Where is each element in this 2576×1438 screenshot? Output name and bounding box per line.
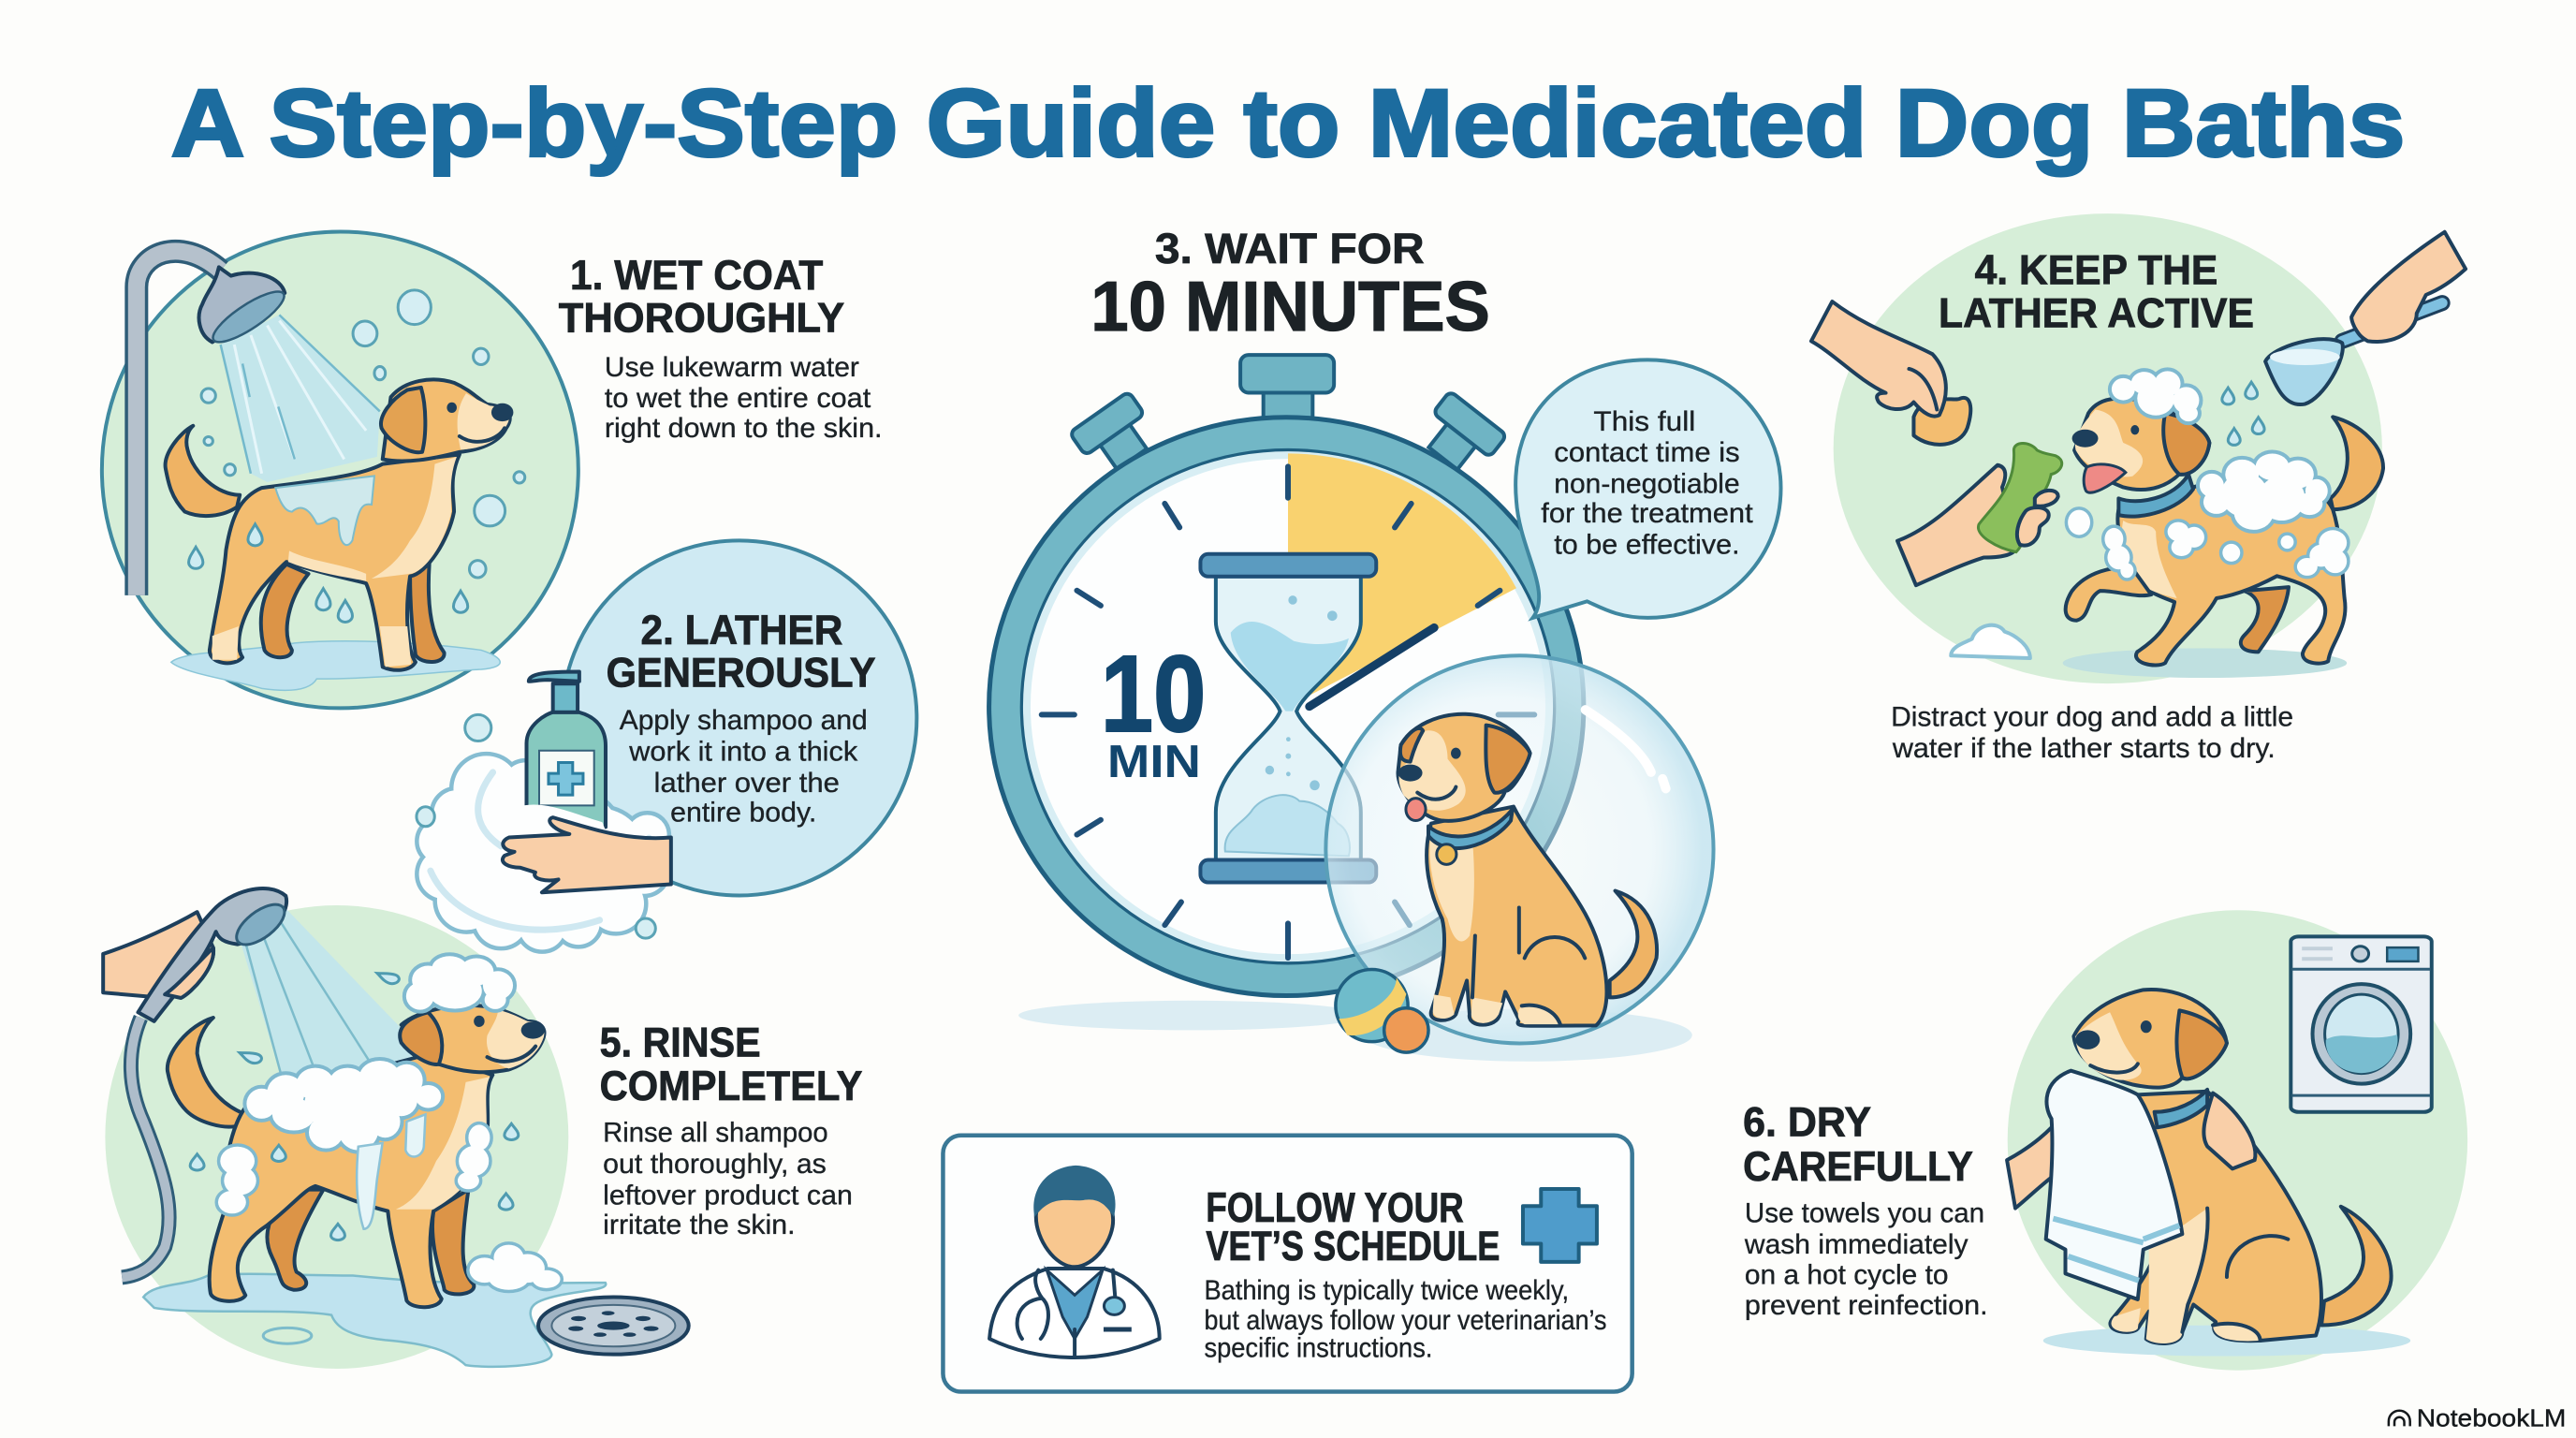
front legs and paws [2112, 1209, 2261, 1343]
falling drops [2222, 382, 2264, 445]
text: step 2 body: entire body. [670, 798, 816, 829]
NotebookLM logo: NotebookLM [2417, 1405, 2566, 1431]
face inner shading [1027, 455, 1549, 958]
text: step 6 body: on a hot cycle to [1745, 1260, 1949, 1291]
green blob backdrop [1834, 213, 2382, 683]
icon: medical cross [1523, 1189, 1597, 1262]
hair [1033, 1166, 1116, 1217]
hose [122, 1018, 169, 1277]
foam on dog [218, 956, 561, 1290]
text: vet schedule body: Bathing is typically twice weekly, [1204, 1275, 1569, 1306]
heading: step 4 [1939, 247, 2254, 336]
handheld shower [138, 888, 294, 1021]
puddle [143, 1274, 606, 1367]
stopwatch buttons [1069, 355, 1507, 480]
text: vet schedule body: specific instructions. [1204, 1333, 1432, 1364]
ground shadow [2063, 648, 2347, 678]
hourglass bars [1200, 554, 1376, 882]
illustration: washer and drying dog [2007, 936, 2432, 1357]
soap bubble [1325, 655, 1714, 1043]
heading: step 4: LATHER ACTIVE [1939, 289, 2254, 336]
hourglass foam [1225, 795, 1350, 856]
heading: step 2: 2. LATHER [641, 607, 842, 653]
callout text: for the treatment [1541, 498, 1753, 529]
heading: step 1 [559, 252, 844, 342]
text: step 6 body: Use towels you can [1745, 1198, 1984, 1229]
text: step 6 body [1744, 1198, 1988, 1321]
dog chest [396, 1077, 490, 1210]
heading: step 6: 6. DRY [1743, 1098, 1871, 1145]
illustration: rinsing dog [103, 888, 689, 1367]
small foam bubbles [417, 714, 655, 938]
drops [190, 969, 519, 1240]
small foam cloud [1951, 625, 2030, 658]
dog far back leg [2241, 587, 2289, 652]
elapsed time wedge [1288, 453, 1516, 707]
panel: vet schedule callout [943, 1136, 1632, 1392]
dog head [2073, 990, 2227, 1088]
heading: step 5: 5. RINSE [600, 1019, 761, 1065]
foam drips [357, 1114, 426, 1229]
text: vet schedule body: but always follow your veterinarian’s [1204, 1305, 1606, 1336]
text: step 1 body: Use lukewarm water [605, 352, 859, 383]
10 MIN label: 10 [1101, 633, 1206, 755]
head [1398, 714, 1530, 821]
tick marks [1042, 466, 1500, 958]
arm [2007, 1112, 2110, 1209]
callout text [1541, 406, 1753, 560]
tail [1610, 890, 1657, 997]
heading: step 6 [1743, 1098, 1973, 1190]
dog muzzle [458, 393, 509, 449]
callout text: This full [1593, 406, 1695, 437]
text: step 5 body: leftover product can [603, 1180, 853, 1211]
scrubs [1046, 1270, 1103, 1339]
dog body [2110, 1092, 2321, 1343]
foam cloud [419, 756, 667, 949]
heading: step 4: 4. KEEP THE [1975, 247, 2217, 294]
text: step 2 body: Apply shampoo and [620, 705, 868, 736]
text: step 5 body [603, 1118, 853, 1240]
bubble highlights [1586, 710, 1666, 788]
10 MIN label: MIN [1107, 737, 1201, 787]
raised front leg [2066, 567, 2151, 621]
small puddle ring [263, 1328, 312, 1343]
collar and tag [1428, 810, 1513, 864]
shampoo bottle [527, 672, 606, 827]
bubbles [201, 290, 525, 578]
heading: step 3: 10 MINUTES [1090, 267, 1490, 345]
dog body [210, 1057, 492, 1307]
face [1398, 748, 1461, 821]
heading: vet schedule [1206, 1184, 1500, 1269]
water spray [242, 908, 413, 1082]
illustration: shampoo bottle and hand [503, 672, 671, 892]
dog far legs [261, 565, 445, 662]
callout text: non-negotiable [1554, 469, 1740, 500]
heading: step 6: CAREFULLY [1743, 1143, 1973, 1190]
shower head [199, 267, 291, 349]
dog tail [2331, 417, 2383, 509]
stethoscope [1017, 1270, 1132, 1357]
text: step 1 body: to wet the entire coat [605, 383, 871, 414]
dog head [383, 379, 510, 462]
stopwatch face [1022, 450, 1554, 962]
coat [989, 1269, 1160, 1357]
foam over bottle base [515, 805, 613, 851]
heading: step 3 [1090, 225, 1490, 345]
panel: step 5 rinse [103, 888, 689, 1369]
hourglass water [1231, 622, 1349, 712]
text: vet schedule body [1204, 1275, 1606, 1364]
dog muzzle [487, 1010, 544, 1068]
balls [1336, 969, 1428, 1052]
dog muzzle [2075, 1012, 2142, 1080]
head [1036, 1194, 1113, 1267]
heading: step 5: COMPLETELY [600, 1063, 863, 1109]
blue circle backdrop [562, 540, 916, 895]
faded ticks inside bubble [1395, 714, 1534, 925]
text: step 1 body [605, 352, 883, 444]
dog far legs [267, 1190, 474, 1294]
title: A Step-by-Step Guide to Medicated Dog Baths [171, 70, 2405, 177]
haunch line [2227, 1236, 2288, 1277]
haunch and leg lines [1472, 907, 1585, 1024]
heading: step 5 [600, 1019, 863, 1109]
heading: step 3: 3. WAIT FOR [1155, 225, 1425, 272]
green circle backdrop [105, 905, 568, 1369]
text: step 4 body: water if the lather starts to dry. [1892, 733, 2276, 764]
hourglass glass [1216, 577, 1361, 860]
dog head [402, 1005, 544, 1072]
text: step 2 body: lather over the [654, 768, 840, 799]
heading: step 2: GENEROUSLY [607, 650, 876, 697]
drain [538, 1297, 689, 1355]
illustration: shower and wet dog [137, 251, 525, 690]
icon: veterinarian [989, 1166, 1160, 1357]
ears [1400, 726, 1530, 793]
towel [2046, 1071, 2182, 1299]
water spray cone [221, 315, 380, 482]
hand with fur [1811, 301, 1970, 445]
dog body [210, 454, 460, 670]
water on back [275, 476, 374, 545]
dog ear [381, 388, 425, 452]
washing machine [2291, 936, 2432, 1112]
foam shading [431, 772, 649, 930]
text: step 5 body: out thoroughly, as [603, 1149, 827, 1180]
dog muzzle [2075, 409, 2143, 477]
collar [2118, 475, 2193, 517]
collar [2155, 1090, 2207, 1127]
panel: step 4 keep lather [1811, 213, 2466, 683]
text: step 5 body: irritate the skin. [603, 1210, 795, 1240]
heading: step 2 [607, 607, 876, 697]
heading: step 1: THOROUGHLY [559, 295, 844, 342]
dog chest cream [212, 457, 457, 667]
dog head [2074, 398, 2209, 490]
panel: step 3 wait [989, 225, 1781, 1062]
shower pipe [137, 251, 221, 595]
ground shadows [1018, 1001, 1692, 1062]
dog face [474, 1016, 545, 1062]
text: step 2 body: work it into a thick [628, 737, 857, 768]
foam patches [2068, 371, 2347, 578]
puddle [171, 641, 500, 690]
dog ear [2163, 413, 2209, 475]
hand on back [2203, 1093, 2255, 1168]
callout text: contact time is [1554, 437, 1740, 468]
dog tail [2321, 1207, 2392, 1325]
heading: step 1: 1. WET COAT [570, 252, 823, 299]
muzzle blaze [1398, 730, 1466, 811]
panel: step 1 wet coat [102, 231, 578, 708]
text: step 6 body: wash immediately [1744, 1229, 1969, 1260]
stopwatch body [989, 418, 1584, 996]
dog ear [400, 1012, 442, 1064]
callout frame [943, 1136, 1632, 1392]
dog tail [168, 1018, 245, 1127]
dog face [2075, 1020, 2152, 1073]
text: step 4 body: Distract your dog and add a little [1891, 702, 2293, 733]
heading: vet schedule: VET’S SCHEDULE [1206, 1223, 1500, 1269]
panel: step 6 dry [2007, 910, 2467, 1371]
dog tail [166, 426, 240, 516]
callout text: to be effective. [1554, 529, 1740, 560]
chest [1429, 830, 1474, 941]
hand with toy [1897, 444, 2062, 585]
hourglass [1200, 554, 1376, 882]
green circle backdrop [2008, 910, 2467, 1371]
sitting dog [1398, 714, 1657, 1026]
dog chest [2122, 521, 2177, 598]
heading: vet schedule: FOLLOW YOUR [1206, 1184, 1464, 1231]
body [1427, 807, 1607, 1026]
text: step 6 body: prevent reinfection. [1745, 1290, 1988, 1321]
hand [503, 817, 671, 892]
ground shadow [2043, 1325, 2410, 1357]
speech bubble callout [1515, 360, 1781, 618]
hand holding shower [103, 912, 213, 998]
text: step 5 body: Rinse all shampoo [603, 1118, 828, 1149]
dog body [2117, 477, 2345, 666]
paws [1433, 994, 1560, 1024]
text: step 2 body [620, 705, 868, 829]
drips [189, 524, 468, 622]
text: step 4 body [1891, 702, 2293, 764]
panel: step 2 lather [417, 540, 916, 949]
clock hand [1310, 627, 1434, 707]
text: step 1 body: right down to the skin. [605, 413, 883, 444]
green circle backdrop [102, 231, 578, 708]
illustration: distraction and dog [1811, 232, 2466, 678]
dog face [446, 403, 513, 442]
dog ear [2176, 1010, 2227, 1078]
hourglass droplets [1266, 595, 1338, 790]
dog face [2072, 425, 2139, 492]
hand with scoop [2265, 232, 2466, 404]
